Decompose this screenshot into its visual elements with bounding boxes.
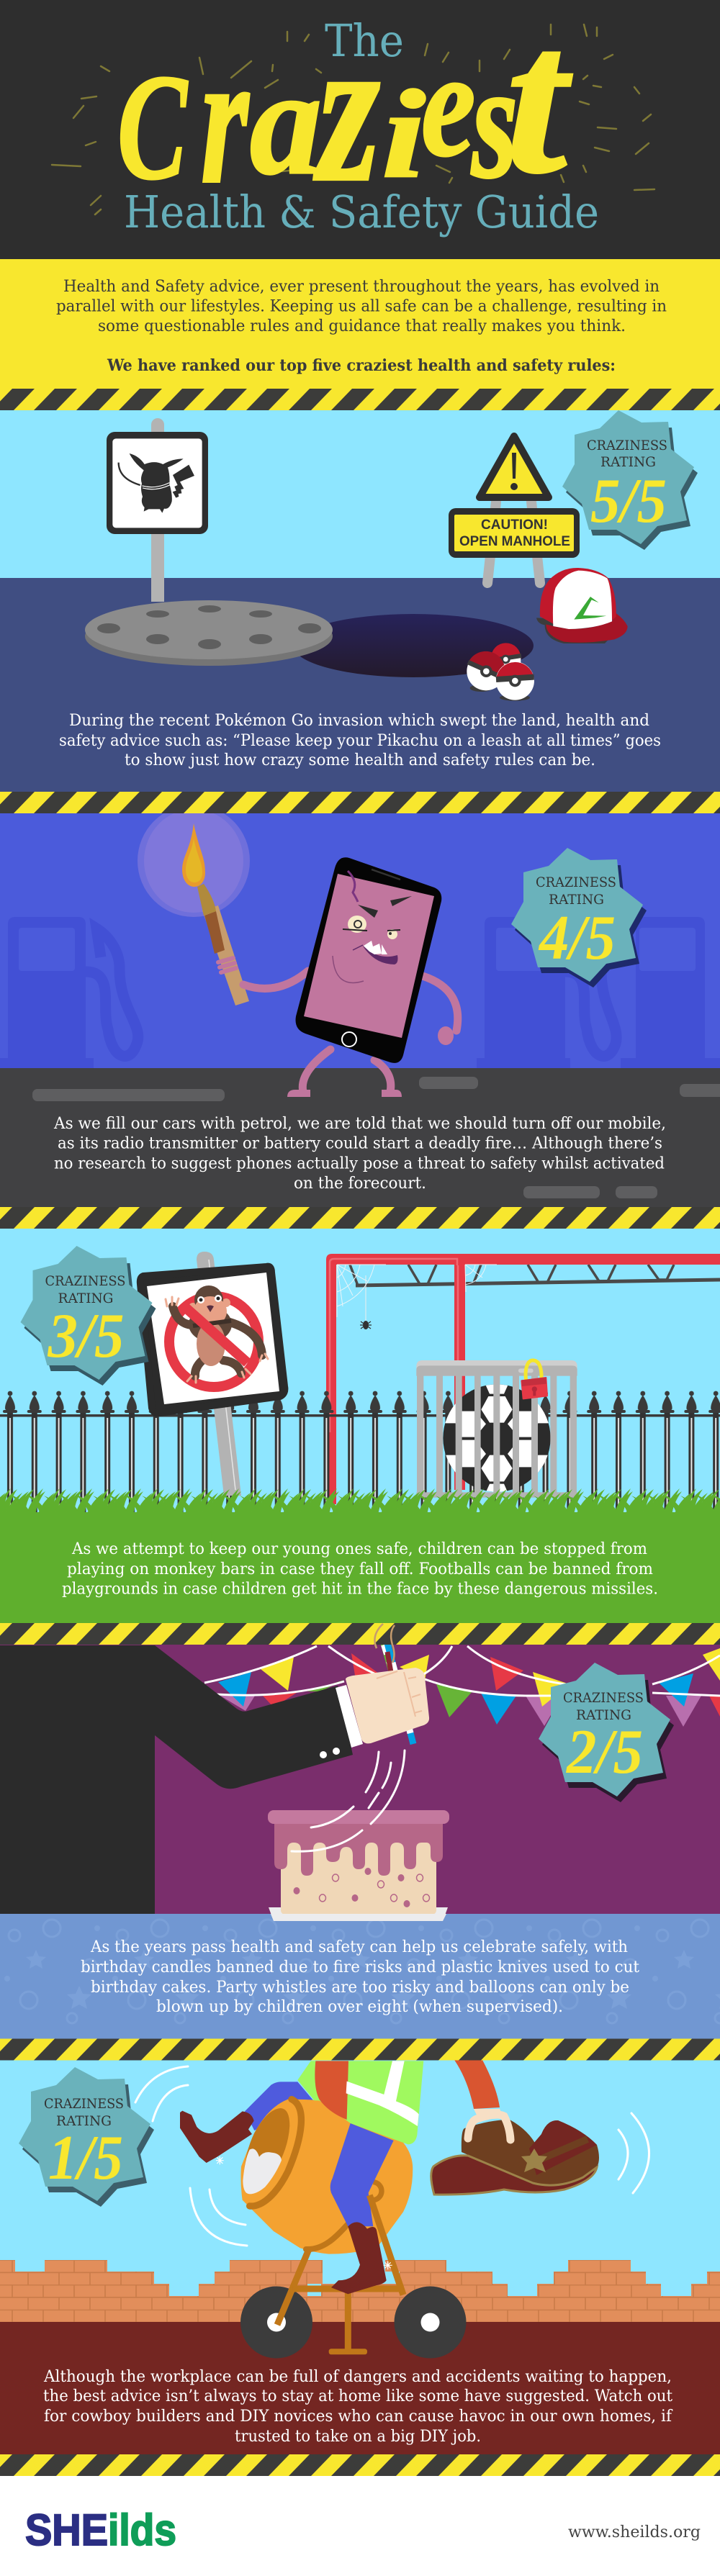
petrol pump silhouettes (0, 917, 720, 1068)
cake plate front (271, 1914, 446, 1921)
cowboy hat (431, 2109, 599, 2195)
phone character limbs (218, 958, 458, 1092)
boot standing (331, 2222, 387, 2294)
rating badge 2/5: RATING (576, 1708, 631, 1723)
rating badge 4/5: CRAZINESS (536, 875, 616, 890)
cement mixer and worker (180, 2061, 423, 2354)
stand foot (329, 2349, 367, 2354)
panel: birthday rule 2/5 (0, 1624, 720, 2039)
text: Pokemon rule: to show just how crazy some health and safety rules can be. (125, 751, 595, 769)
rating badge 5/5: RATING (600, 455, 656, 470)
hazard stripe divider 1 (0, 389, 720, 410)
warning sign and caution board: OPEN MANHOLE (459, 534, 570, 549)
suit arm (0, 1645, 353, 1914)
mixer frame back (277, 2195, 403, 2351)
text: cowboy builder rule: the best advice isn’t always to stay at home like some have suggested. Watch out (43, 2387, 672, 2405)
rating badge 5/5: 5/5 (590, 466, 667, 536)
sign post (151, 418, 164, 602)
candle tops over stripe (374, 1624, 395, 1648)
monkey bars (350, 1265, 720, 1285)
text: petrol rule: no research to suggest phones actually pose a threat to safety whilst activated (54, 1154, 665, 1173)
rating badge 5/5 (562, 410, 698, 550)
text: playground rule (62, 1540, 658, 1598)
text: playground rule: playgrounds in case children get hit in the face by these dangerous missiles. (62, 1581, 658, 1598)
panel: petrol station rule 4/5 (0, 805, 720, 1208)
footer logo: SHE (25, 2505, 108, 2554)
torch with flame and glow (138, 805, 250, 1005)
title (117, 0, 599, 238)
hazard stripe divider 6 (0, 2454, 720, 2476)
panel: cowboy builder rule 1/5 (0, 2060, 720, 2454)
cobwebs (337, 1265, 497, 1317)
iron railings (0, 1389, 720, 1515)
rating badge 3/5: CRAZINESS (45, 1274, 126, 1289)
manhole hole (293, 614, 534, 677)
title: i (382, 64, 426, 204)
footer logo (25, 2505, 176, 2554)
spider (360, 1275, 372, 1329)
title: s (470, 30, 518, 213)
front trouser leg (330, 2123, 394, 2226)
intro panel: We have ranked our top five craziest health and safety rules: (107, 356, 616, 375)
vest straps (346, 2061, 419, 2126)
vest (297, 2061, 423, 2144)
wheels (240, 2286, 467, 2358)
rating badge 3/5: 3/5 (47, 1301, 125, 1371)
padlock (518, 1360, 547, 1398)
title: a (250, 39, 322, 206)
shirt (315, 2061, 348, 2120)
icon: trainer cap (536, 568, 628, 643)
rating badge 4/5 (511, 848, 647, 988)
rating badge 4/5: 4/5 (538, 903, 616, 973)
title: C (117, 44, 189, 212)
rating badge 4/5: RATING (549, 892, 604, 908)
hazard stripe divider 3 (0, 1207, 720, 1229)
title: e (421, 21, 475, 188)
rating badge 2/5: 2/5 (566, 1717, 643, 1787)
front frame leg (369, 2195, 403, 2295)
header panel (0, 0, 720, 259)
rating badge 2/5: CRAZINESS (563, 1691, 644, 1706)
text: petrol rule: on the forecourt. (294, 1175, 426, 1193)
footer logo: ilds (108, 2505, 176, 2554)
rating badge 3/5: RATING (58, 1291, 114, 1306)
cage bars (416, 1360, 577, 1498)
phone face (333, 871, 412, 982)
phone feet and hand (287, 1026, 454, 1097)
worker right arm (454, 2060, 500, 2109)
text: birthday rule: blown up by children over eight (when supervised). (156, 1998, 563, 2016)
warning sign and caution board (449, 436, 580, 583)
cuff buttons (320, 1748, 340, 1758)
title: The (325, 14, 404, 67)
rating badge 1/5: 1/5 (48, 2123, 123, 2193)
text: petrol rule: as its radio transmitter or battery could start a deadly fire… Although there’s (58, 1134, 662, 1153)
rating badge 1/5 (19, 2067, 154, 2207)
road (0, 1068, 720, 1208)
rating badge 3/5 (20, 1246, 156, 1386)
text: birthday rule: birthday candles banned due to fire risks and plastic knives used to cut (81, 1958, 639, 1976)
text: cowboy builder rule: for cowboy builders and DIY novices who can cause havoc in our own homes, if (44, 2408, 673, 2426)
candles (374, 1624, 413, 1744)
hazard stripe divider 2 (0, 792, 720, 813)
hazard stripe divider 5 (0, 2038, 720, 2060)
monkey (166, 1285, 268, 1383)
falling motion lines (292, 1750, 405, 1851)
boot kicking (180, 2111, 254, 2163)
caged football (416, 1360, 577, 1498)
decorative paint flecks around title (52, 24, 654, 214)
rating badge 5/5: CRAZINESS (587, 438, 667, 453)
rating badge 2/5 (539, 1663, 674, 1802)
hand and cuff (336, 1668, 429, 1748)
text: playground rule: playing on monkey bars in case they fall off. Footballs can be banned from (67, 1560, 653, 1578)
spur sparks (216, 2156, 392, 2269)
intro panel (0, 259, 720, 389)
rear trouser leg (245, 2082, 315, 2130)
text: birthday rule: As the years pass health and safety can help us celebrate safely, with (90, 1938, 628, 1956)
title: Health & Safety Guide (124, 186, 599, 238)
grass (0, 1487, 720, 1623)
panel: Pokemon rule 5/5 (0, 410, 720, 792)
bunting (204, 1646, 720, 1727)
text: Pokemon rule (59, 712, 661, 769)
ground (0, 2322, 720, 2454)
drum (240, 2100, 413, 2254)
text: cowboy builder rule (43, 2368, 673, 2446)
text: cowboy builder rule: trusted to take on a big DIY job. (235, 2428, 481, 2446)
red climbing frame (326, 1254, 720, 1504)
title: r (201, 14, 250, 222)
text: Pokemon rule: safety advice such as: “Please keep your Pikachu on a leash at all times” goes (59, 732, 661, 750)
rating badge 1/5: RATING (56, 2114, 112, 2129)
text: playground rule: As we attempt to keep our young ones safe, children can be stopped from (71, 1540, 647, 1558)
intro panel: Health and Safety advice, ever present throughout the years, has evolved in (63, 278, 660, 296)
warning sign and caution board: CAUTION! (481, 518, 548, 533)
intro panel: some questionable rules and guidance that really makes you think. (98, 317, 626, 335)
pikachu leash sign (107, 432, 208, 534)
panel: playground rule 3/5 (0, 1229, 720, 1623)
intro panel: parallel with our lifestyles. Keeping us all safe can be a challenge, resulting in (56, 298, 667, 315)
hazard stripe divider 4 (0, 1623, 720, 1645)
text: birthday rule (81, 1938, 639, 2016)
brick wall (0, 2260, 720, 2323)
text: petrol rule: As we fill our cars with petrol, we are told that we should turn off our mobile, (53, 1115, 666, 1133)
text: cowboy builder rule: Although the workplace can be full of dangers and accidents waiting to happen, (43, 2368, 672, 2386)
motion arcs (135, 2066, 649, 2246)
icon: poke balls (467, 643, 534, 701)
no monkeys sign (140, 1252, 284, 1496)
footer url: www.sheilds.org (568, 2523, 701, 2541)
phone character (296, 857, 441, 1063)
party pattern background and text panel (0, 1914, 720, 2039)
text: Pokemon rule: During the recent Pokémon Go invasion which swept the land, health and (69, 712, 649, 730)
text: petrol rule (53, 1115, 666, 1193)
manhole cover (85, 600, 333, 666)
title: z (313, 0, 380, 225)
cake (268, 1810, 449, 1921)
text: birthday rule: birthday cakes. Party whistles are too risky and balloons can only be (91, 1979, 629, 1997)
rating badge 1/5: CRAZINESS (44, 2097, 124, 2112)
